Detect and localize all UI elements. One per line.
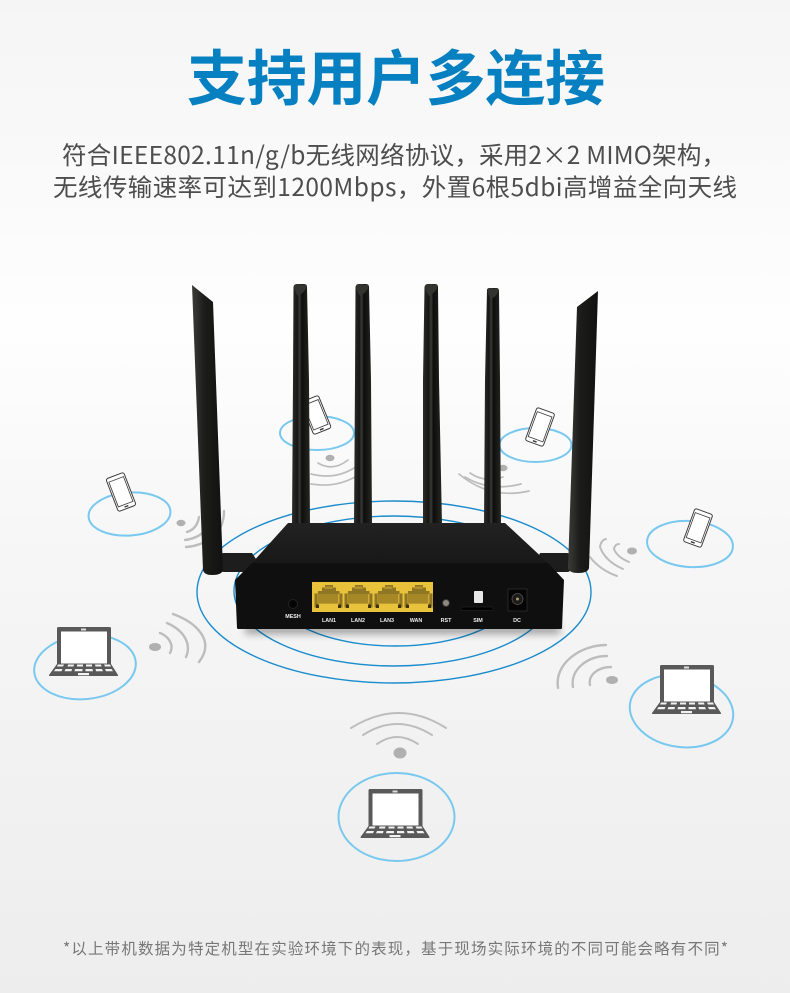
description text: 无线传输速率可达到1200Mbps，外置6根5dbi高增益全向天线 (53, 169, 737, 204)
device: phone right (646, 508, 734, 570)
device: laptop right (625, 665, 738, 754)
reset button (442, 600, 450, 606)
device: phone top left (87, 472, 172, 538)
device: phone behind antenna (280, 395, 354, 450)
title: 支持用户多连接 (187, 31, 605, 118)
port labels: LAN2 (351, 618, 365, 624)
port labels: MESH (285, 614, 301, 620)
port labels: LAN1 (322, 618, 336, 624)
wifi signal: laptop left (149, 614, 205, 662)
port labels: WAN (410, 618, 422, 624)
left connector (221, 553, 258, 572)
centre antennas (292, 284, 501, 525)
footnote: *以上带机数据为特定机型在实验环境下的表现，基于现场实际环境的不同可能会略有不同* (63, 937, 728, 959)
wifi signal: laptop bottom (351, 713, 446, 758)
wifi signal: phone behind antenna (311, 455, 355, 485)
port labels: DC (513, 618, 521, 624)
DC jack (508, 589, 527, 611)
device: laptop bottom (338, 773, 454, 861)
description text: 符合IEEE802.11n/g/b无线网络协议， (62, 137, 479, 172)
wifi signal: laptop right (558, 645, 618, 688)
port labels: SIM (473, 618, 483, 624)
router shadow (245, 625, 560, 634)
router top (252, 523, 548, 563)
router front panel (235, 563, 564, 629)
LAN port block (312, 582, 433, 612)
router (192, 284, 598, 634)
signal rings around router (197, 501, 591, 683)
port labels (285, 614, 521, 624)
device: phone top right (500, 407, 572, 462)
right outer antenna (568, 291, 598, 573)
description text (53, 137, 737, 204)
device: laptop left (31, 627, 139, 704)
wifi signal: phone top right (459, 465, 529, 493)
SIM slot (461, 591, 493, 610)
port labels: LAN3 (380, 618, 394, 624)
wifi signal: phone top left (176, 511, 224, 547)
description text: 采用2×2 MIMO架构， (479, 137, 726, 172)
mesh button (288, 600, 298, 608)
wifi signal: phone right (590, 539, 637, 576)
port labels: RST (441, 618, 452, 624)
left outer antenna (192, 285, 223, 575)
right connector (536, 553, 570, 572)
